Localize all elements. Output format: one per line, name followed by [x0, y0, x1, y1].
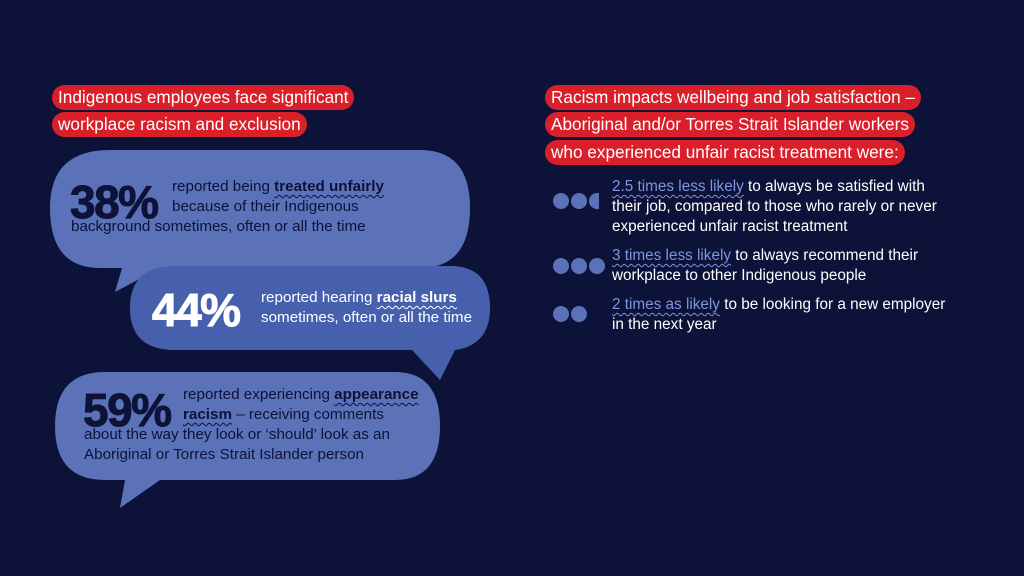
stat 44%: sometimes, often or all the time: [261, 309, 472, 326]
heading left: Indigenous employees face significant: [58, 87, 348, 107]
stat 44%: 44%: [152, 284, 240, 336]
stat 59%: reported experiencing appearance: [183, 386, 419, 403]
stat 59%: 59%: [83, 384, 171, 436]
bubble 2: [130, 266, 490, 380]
stat 44%: [152, 284, 472, 336]
item 1: their job, compared to those who rarely or never: [612, 198, 937, 215]
item 2: workplace to other Indigenous people: [612, 267, 866, 284]
item 1: 2.5 times less likely to always be satisfied with: [612, 178, 925, 195]
item 1: [553, 178, 937, 235]
item 3: in the next year: [612, 316, 717, 333]
heading right: Racism impacts wellbeing and job satisfaction –: [551, 87, 915, 107]
heading right: who experienced unfair racist treatment were:: [551, 142, 899, 162]
stat 59%: Aboriginal or Torres Strait Islander person: [84, 446, 364, 463]
item 2: 3 times less likely to always recommend their: [612, 247, 918, 264]
item 1: experienced unfair racist treatment: [612, 218, 848, 235]
icon: 2.5 dots: [553, 193, 599, 209]
heading left: [52, 85, 354, 137]
heading right: [545, 85, 921, 165]
stat 38%: because of their Indigenous: [172, 198, 359, 215]
item 2: [553, 247, 918, 284]
stat 38%: [70, 176, 384, 235]
heading left: workplace racism and exclusion: [58, 114, 301, 134]
bubble 3: [55, 372, 440, 508]
icon: 3 dots: [553, 258, 605, 274]
stat 38%: reported being treated unfairly: [172, 178, 384, 195]
item 3: 2 times as likely to be looking for a new employer: [612, 296, 945, 313]
stat 59%: racism – receiving comments: [183, 406, 384, 423]
stat 38%: 38%: [70, 176, 158, 228]
stat 38%: background sometimes, often or all the time: [71, 218, 366, 235]
stat 44%: reported hearing racial slurs: [261, 289, 457, 306]
heading right: Aboriginal and/or Torres Strait Islander workers: [551, 114, 909, 134]
icon: 2 dots: [553, 306, 587, 322]
item 3: [553, 296, 946, 333]
stat 59%: about the way they look or ‘should’ look as an: [84, 426, 390, 443]
bubble 1: [50, 150, 470, 292]
stat 59%: [83, 384, 419, 463]
